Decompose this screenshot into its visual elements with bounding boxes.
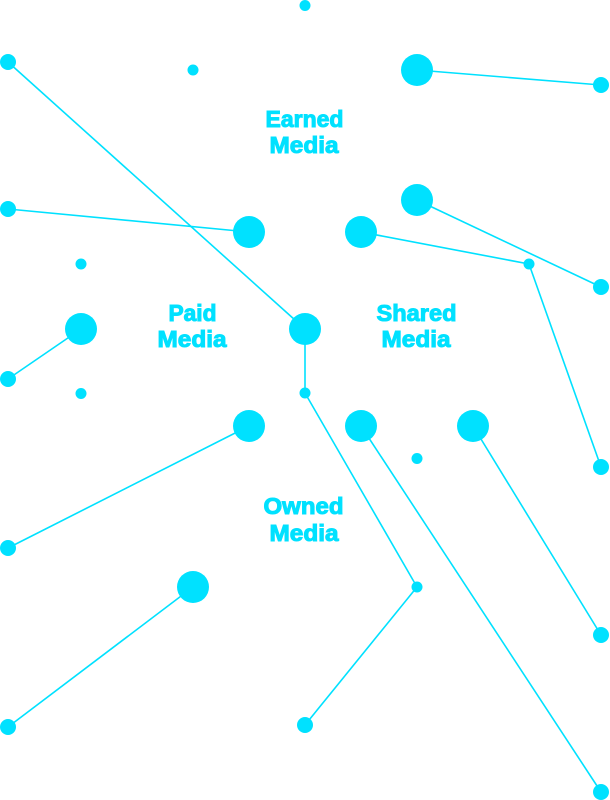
label: Owned Media xyxy=(264,493,344,546)
connector: centre hub through junctions to bottom node xyxy=(297,329,422,733)
label: Shared Media: Media xyxy=(382,326,451,352)
connector: upper left node to centre hub xyxy=(0,54,321,345)
connector: left node to owned hub xyxy=(0,410,265,556)
label: Shared Media: Shared xyxy=(376,300,456,326)
isolated small dots xyxy=(76,0,422,464)
connector: left node to paid media hub xyxy=(0,313,97,387)
label: Earned Media xyxy=(266,106,344,158)
connector: shared hub to lower right node xyxy=(457,410,609,643)
label: Owned Media: Media xyxy=(270,520,339,546)
label: Earned Media: Media xyxy=(270,132,339,158)
label: Owned Media: Owned xyxy=(264,493,344,519)
connector: top right hub to right node xyxy=(401,54,609,93)
label: Paid Media xyxy=(158,300,227,352)
connector: owned hub to bottom right node xyxy=(345,410,609,800)
connector: left node to paid hub xyxy=(0,201,265,248)
label: Paid Media: Media xyxy=(158,326,227,352)
connector: bottom left node to hub xyxy=(0,571,209,735)
connector: earned hub through junction to right node xyxy=(345,216,609,475)
connector: shared hub to right node xyxy=(401,184,609,295)
label: Paid Media: Paid xyxy=(168,300,216,326)
label: Earned Media: Earned xyxy=(266,106,344,132)
label: Shared Media xyxy=(376,300,456,352)
